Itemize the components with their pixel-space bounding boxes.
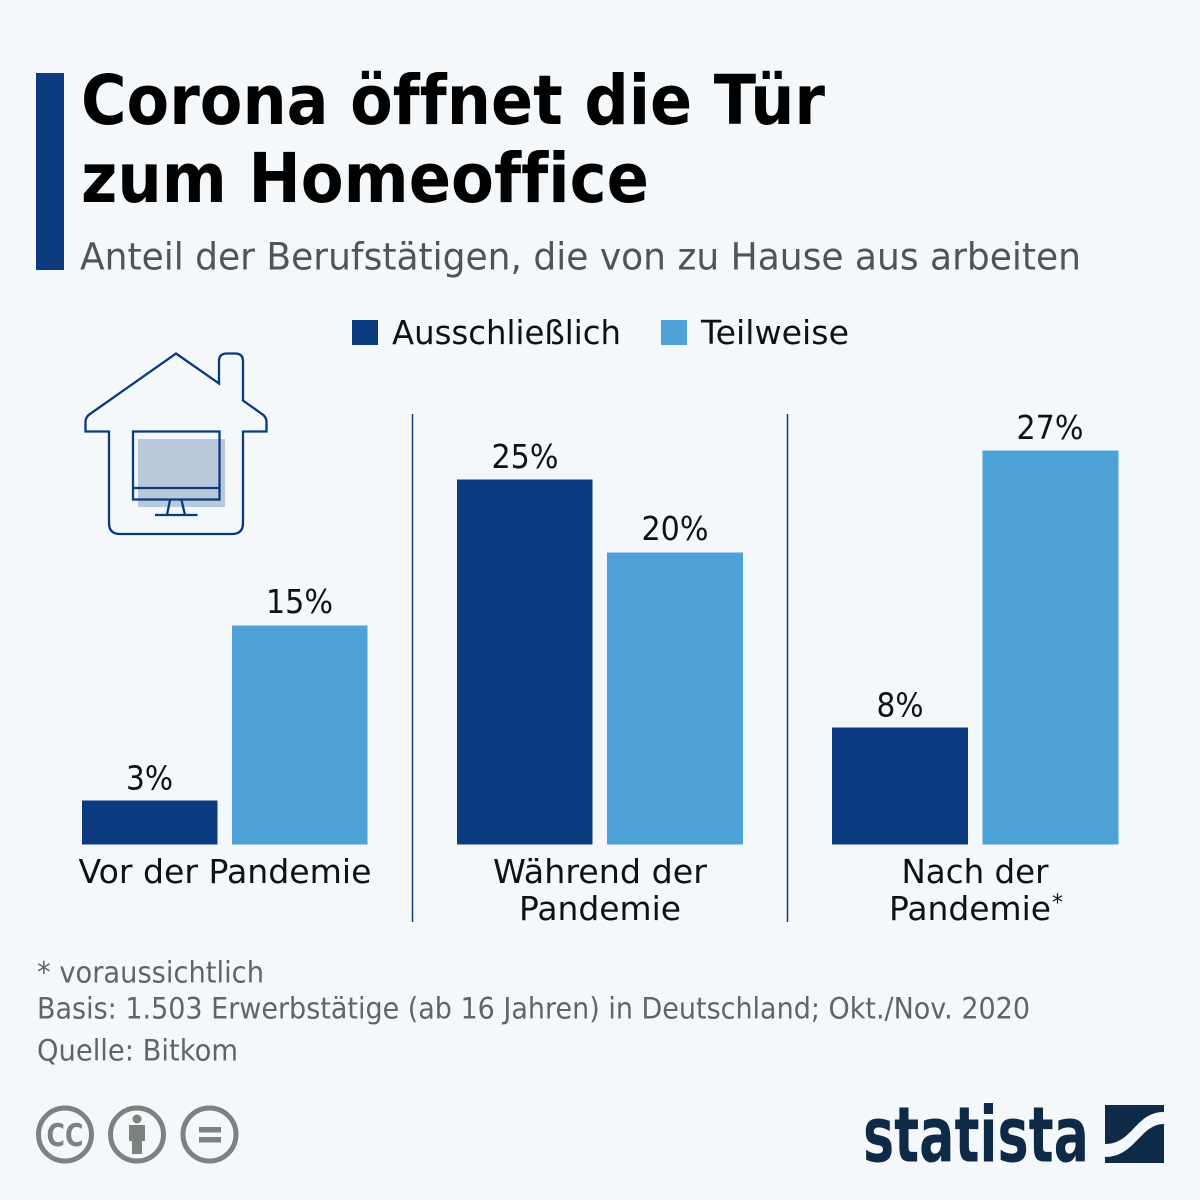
bar group: Vor der Pandemie xyxy=(78,582,372,891)
legend xyxy=(352,313,849,352)
logo: statista wordmark: statista xyxy=(863,1092,1089,1180)
title: zum Homeoffice xyxy=(81,139,649,219)
title xyxy=(81,61,825,219)
bar group: Während der Pandemie: 20% xyxy=(642,509,708,548)
bar group: Während der Pandemie xyxy=(457,437,743,928)
footnotes and source: Quelle: Bitkom xyxy=(37,1034,238,1068)
bar group: Nach der Pandemie: Nach der xyxy=(902,852,1049,891)
bar group: Während der Pandemie: Pandemie xyxy=(519,889,681,928)
bar group: Nach der Pandemie xyxy=(832,408,1118,928)
icon: house with computer monitor xyxy=(86,354,266,534)
title: Corona öffnet die Tür xyxy=(81,61,825,141)
legend: Ausschließlich xyxy=(392,313,621,352)
icon: creative commons xyxy=(38,1108,92,1161)
bar group: Während der Pandemie: 25% xyxy=(492,437,558,476)
footnotes and source: Basis: 1.503 Erwerbstätige (ab 16 Jahren) in Deutschland; Okt./Nov. 2020 xyxy=(37,992,1030,1026)
bar group: Während der Pandemie: Während der xyxy=(493,852,707,891)
bar group: Nach der Pandemie: 8% xyxy=(876,686,924,724)
bar group: Vor der Pandemie: Vor der Pandemie xyxy=(78,852,372,891)
footnotes and source xyxy=(37,956,1030,1068)
bar group: Vor der Pandemie: 3% xyxy=(126,758,173,798)
bar group: Nach der Pandemie: 27% xyxy=(1016,408,1084,447)
logo: statista mark xyxy=(1105,1105,1164,1163)
divider left xyxy=(412,414,414,922)
icon: no derivatives xyxy=(183,1108,236,1161)
bar group: Nach der Pandemie: * xyxy=(1052,891,1063,916)
bar group: Nach der Pandemie: Pandemie xyxy=(889,889,1051,928)
accent bar xyxy=(36,73,64,270)
legend: Teilweise xyxy=(700,313,849,352)
icon: attribution xyxy=(110,1108,164,1161)
icon: creative commons: CC xyxy=(46,1118,84,1154)
footnotes and source: * voraussichtlich xyxy=(37,956,264,990)
bar group: Vor der Pandemie: 15% xyxy=(266,582,333,621)
divider right xyxy=(786,414,788,922)
subtitle: Anteil der Berufstätigen, die von zu Hause aus arbeiten xyxy=(80,236,1081,278)
